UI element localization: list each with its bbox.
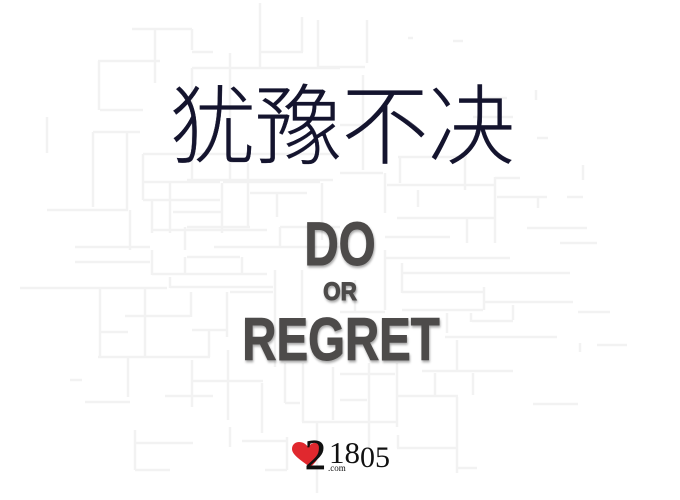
text: DO: DO	[304, 209, 376, 278]
text: .com: .com	[328, 463, 346, 473]
text: 2: 2	[305, 433, 326, 479]
icon: red heart	[292, 442, 321, 467]
text: 1805: 05	[360, 441, 390, 474]
text: 1805: 18	[329, 435, 360, 470]
text: OR: OR	[323, 278, 357, 306]
title: 犹豫不决	[169, 79, 515, 176]
text: REGRET: REGRET	[242, 307, 440, 373]
